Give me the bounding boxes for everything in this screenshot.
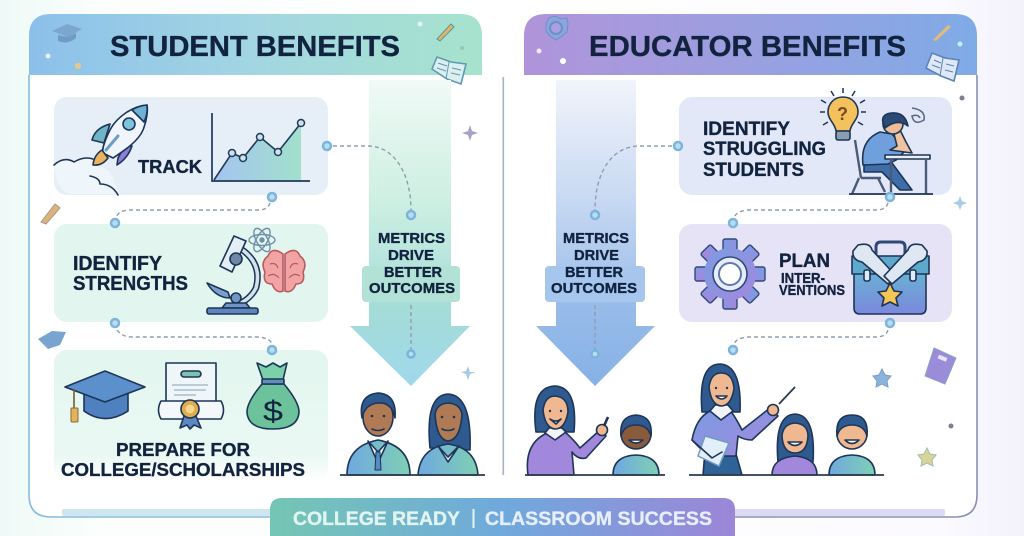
heading: educator benefits: EDUCATOR BENEFITS bbox=[589, 31, 906, 63]
illustration: teacher with student bbox=[525, 386, 665, 475]
label: identify strengths: IDENTIFY bbox=[73, 253, 163, 275]
card: plan interventions bbox=[679, 224, 952, 322]
icon: question light bulb: ? bbox=[837, 104, 848, 124]
label: prepare for college scholarships bbox=[61, 439, 305, 480]
icon: header decorations student bbox=[46, 22, 466, 84]
icon: struggling student at desk bbox=[849, 108, 933, 194]
chart: line chart bbox=[212, 113, 310, 181]
label: identify struggling students bbox=[703, 118, 826, 181]
label: metrics drive better outcomes student: BETTER bbox=[384, 264, 442, 281]
label: track: TRACK bbox=[138, 156, 203, 177]
label: prepare for college scholarships: COLLEGE/SCHOLARSHIPS bbox=[61, 459, 305, 480]
panel: student benefits bbox=[29, 14, 503, 517]
arrow: student metrics bbox=[350, 80, 470, 386]
card: identify struggling students bbox=[679, 88, 952, 195]
card: prepare for college bbox=[54, 350, 328, 482]
label: plan interventions: VENTIONS bbox=[779, 283, 845, 299]
label: metrics drive better outcomes student: OUTCOMES bbox=[369, 280, 455, 297]
label: identify strengths: STRENGTHS bbox=[73, 273, 188, 295]
icon: brain bbox=[263, 250, 305, 292]
label: metrics drive better outcomes educator: DRIVE bbox=[574, 247, 619, 264]
footer banner: COLLEGE READY bbox=[293, 508, 460, 530]
icon: header decorations educator bbox=[536, 16, 962, 81]
label: plan interventions bbox=[779, 250, 845, 299]
heading: student benefits: STUDENT BENEFITS bbox=[110, 31, 400, 63]
label: identify struggling students: STRUGGLING bbox=[703, 138, 826, 160]
label: identify strengths bbox=[73, 253, 188, 295]
icon: microscope bbox=[207, 236, 258, 314]
illustration: two students bbox=[340, 393, 485, 475]
panel: educator benefits bbox=[503, 14, 977, 517]
label: metrics drive better outcomes educator: OUTCOMES bbox=[551, 280, 637, 297]
label: metrics drive better outcomes educator: METRICS bbox=[563, 230, 629, 247]
icon: money bag: $ bbox=[263, 396, 283, 428]
icon: money bag bbox=[247, 363, 299, 429]
label: plan interventions: INTER- bbox=[781, 271, 825, 287]
label: metrics drive better outcomes educator bbox=[545, 230, 645, 302]
label: prepare for college scholarships: PREPARE FOR bbox=[116, 439, 250, 460]
label: metrics drive better outcomes student bbox=[362, 230, 460, 302]
illustration: teacher with two students bbox=[689, 364, 884, 475]
icon: question light bulb bbox=[820, 88, 866, 140]
card: track bbox=[54, 97, 328, 195]
footer banner: CLASSROOM SUCCESS bbox=[485, 508, 712, 530]
icon: atom bbox=[249, 226, 275, 254]
center divider bbox=[502, 77, 504, 475]
label: plan interventions: PLAN bbox=[779, 250, 830, 272]
card: identify strengths bbox=[54, 224, 328, 322]
label: metrics drive better outcomes student: METRICS bbox=[378, 230, 445, 247]
icon: rocket bbox=[54, 105, 147, 195]
icon: diploma bbox=[158, 363, 224, 429]
connectors: educator dashed links bbox=[591, 142, 894, 358]
arrow: educator metrics bbox=[536, 80, 655, 386]
footer banner bbox=[270, 498, 735, 536]
connectors: student dashed links bbox=[111, 142, 415, 358]
label: identify struggling students: IDENTIFY bbox=[703, 118, 790, 140]
icon: gear bbox=[695, 239, 765, 309]
icon: toolbox bbox=[852, 242, 929, 314]
icon: graduation cap bbox=[65, 371, 145, 422]
icon: floating decorations bbox=[38, 96, 967, 466]
label: metrics drive better outcomes student: DRIVE bbox=[388, 247, 434, 264]
label: identify struggling students: STUDENTS bbox=[703, 159, 804, 181]
label: metrics drive better outcomes educator: BETTER bbox=[565, 264, 623, 281]
